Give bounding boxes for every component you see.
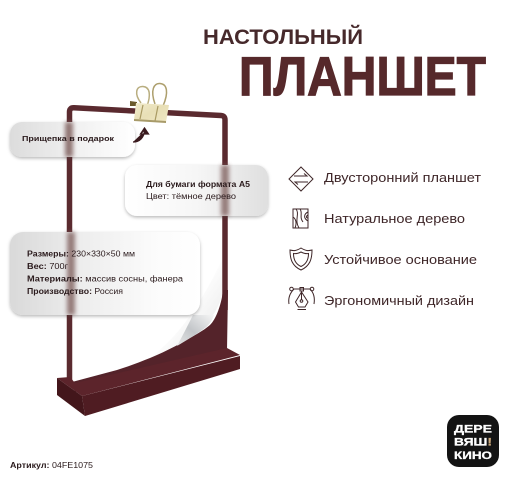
- text: specifications: Производство: Россия: [27, 287, 123, 296]
- title: настольный: НАСТОЛЬНЫЙ: [203, 24, 363, 49]
- text: clip note: Прищепка в подарок: [22, 134, 114, 143]
- icon: stable base: [290, 248, 312, 270]
- product: tablet stand: [57, 108, 240, 416]
- text: natural wood: Натуральное дерево: [324, 211, 465, 226]
- text: colour: Цвет: тёмное дерево: [146, 192, 237, 201]
- blurred frame behind card: [221, 165, 229, 216]
- logo: ДЕРЕ: [454, 424, 492, 436]
- text: format: Для бумаги формата А5: [146, 180, 251, 189]
- base left face: [57, 378, 85, 416]
- logo: [447, 415, 499, 467]
- icon: two-sided: [289, 167, 313, 191]
- logo: ВЯШ !: [454, 436, 492, 448]
- blurred frame behind card: [67, 232, 75, 315]
- blurred frame behind card: [65, 122, 73, 157]
- base top face: [57, 348, 240, 396]
- wooden sweep: [72, 290, 228, 392]
- article number: Артикул: 04FE1075: [10, 461, 94, 470]
- text: two-sided: Двусторонний планшет: [324, 170, 481, 185]
- clip: [130, 83, 169, 123]
- panel: clip note: [10, 122, 135, 157]
- paper shading: [150, 260, 222, 358]
- logo: КИНО: [454, 450, 493, 462]
- icon: ergonomic design: [289, 287, 314, 310]
- text: ergonomic design: Эргономичный дизайн: [324, 293, 474, 308]
- text: specifications: Материалы: массив сосны, фанера: [27, 274, 184, 284]
- base: [57, 348, 240, 416]
- text: specifications: Размеры: 230×330×50 мм: [27, 250, 135, 258]
- text: specifications: Вес: 700г: [27, 262, 68, 271]
- base front face: [82, 356, 240, 416]
- paper curl: [177, 315, 214, 346]
- icon: natural wood: [293, 209, 308, 228]
- panel: format note: [125, 165, 268, 216]
- panel: specifications: [10, 232, 200, 315]
- frame: [70, 108, 225, 383]
- text: stable base: Устойчивое основание: [324, 252, 477, 267]
- text: specifications: [27, 250, 184, 296]
- arrow: [133, 128, 148, 142]
